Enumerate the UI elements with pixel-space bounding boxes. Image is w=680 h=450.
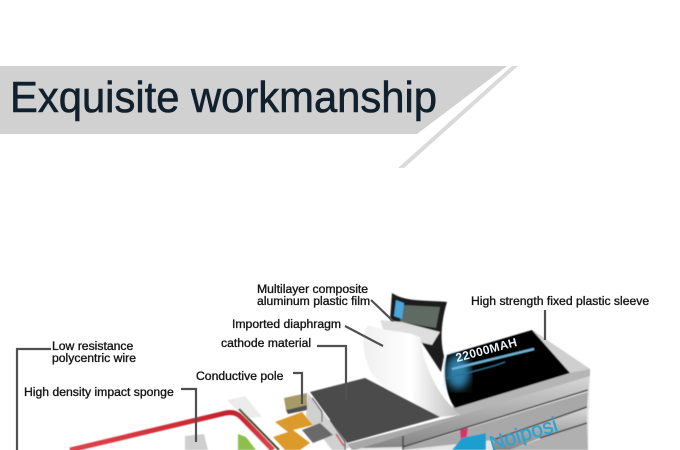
label: low resistance polycentric wire: polycentric wire xyxy=(52,351,136,365)
label: high density impact sponge: High density impact sponge xyxy=(24,385,174,399)
label: high strength fixed plastic sleeve: High strength fixed plastic sleeve xyxy=(471,294,649,308)
battery print: 22000MAH xyxy=(454,335,519,365)
copper tabs xyxy=(273,412,313,450)
cell side xyxy=(306,393,350,450)
label: high density impact sponge xyxy=(24,385,196,442)
wire xyxy=(70,413,273,450)
label: cathode material xyxy=(221,336,346,401)
battery illustration xyxy=(70,293,590,450)
label: cathode material: cathode material xyxy=(221,336,311,350)
label: multilayer composite aluminum plastic film xyxy=(257,282,393,321)
conductive pole xyxy=(284,393,307,414)
label: low resistance polycentric wire: Low resistance xyxy=(52,339,134,353)
label: conductive pole: Conductive pole xyxy=(196,369,284,383)
title: Exquisite workmanship xyxy=(10,73,437,122)
label: imported diaphragm: Imported diaphragm xyxy=(232,317,341,331)
label: multilayer composite aluminum plastic film: aluminum plastic film xyxy=(257,294,370,308)
logo xyxy=(452,428,486,450)
battery screen xyxy=(445,330,570,408)
diaphragm sheet xyxy=(363,325,459,417)
title banner xyxy=(0,66,518,168)
label: imported diaphragm xyxy=(232,317,383,346)
battery case xyxy=(352,330,590,450)
label: low resistance polycentric wire xyxy=(17,339,136,450)
sponge xyxy=(227,396,262,418)
label: multilayer composite aluminum plastic film: Multilayer composite xyxy=(257,282,368,296)
cathode sheet xyxy=(310,378,440,443)
multilayer film xyxy=(390,293,447,372)
hatched edge xyxy=(347,415,459,450)
label: conductive pole xyxy=(196,369,302,404)
